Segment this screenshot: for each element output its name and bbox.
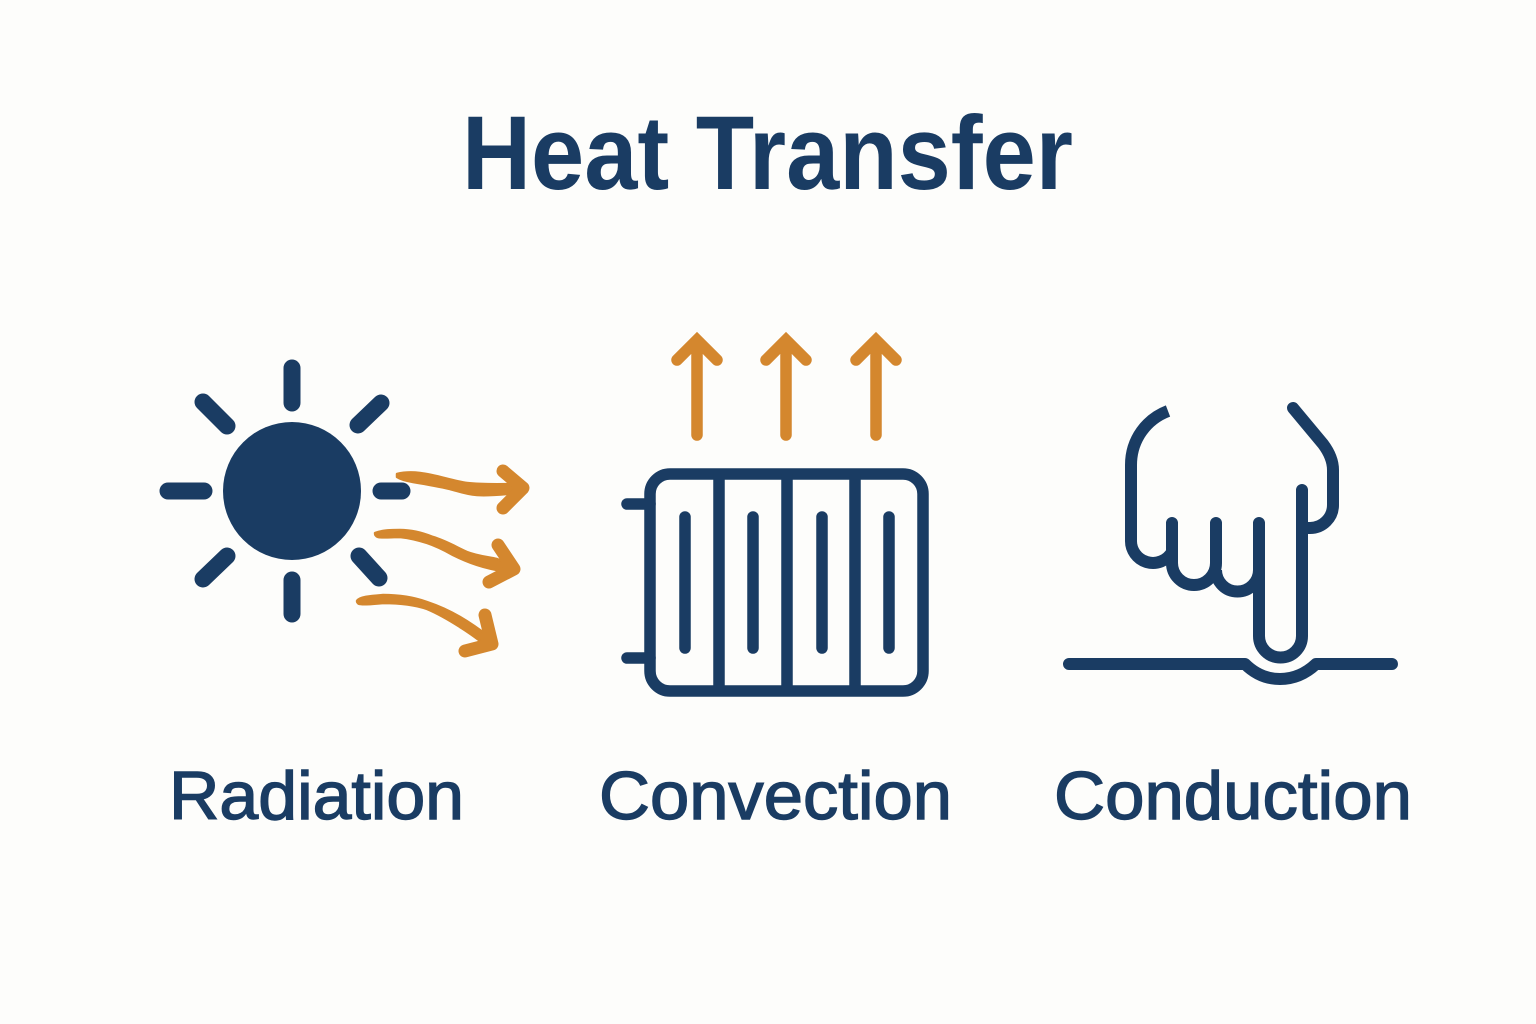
icon: pointing hand bbox=[1131, 408, 1333, 658]
label: radiation: Radiation bbox=[169, 758, 464, 834]
icon: three rising arrows bbox=[677, 340, 896, 435]
panel: conduction bbox=[1054, 408, 1412, 834]
arrow: lower radiation ray bbox=[357, 595, 493, 651]
arrow: upper radiation ray bbox=[397, 471, 523, 508]
panel: convection bbox=[599, 340, 952, 834]
icon: sun bbox=[168, 368, 402, 614]
icon: radiator bbox=[627, 474, 923, 691]
arrow: middle radiation ray bbox=[375, 530, 518, 582]
title: Heat Transfer bbox=[462, 95, 1073, 212]
panel: radiation bbox=[168, 368, 523, 834]
icon: heated surface bbox=[1069, 664, 1392, 679]
label: conduction: Conduction bbox=[1054, 758, 1412, 834]
label: convection: Convection bbox=[599, 758, 952, 834]
